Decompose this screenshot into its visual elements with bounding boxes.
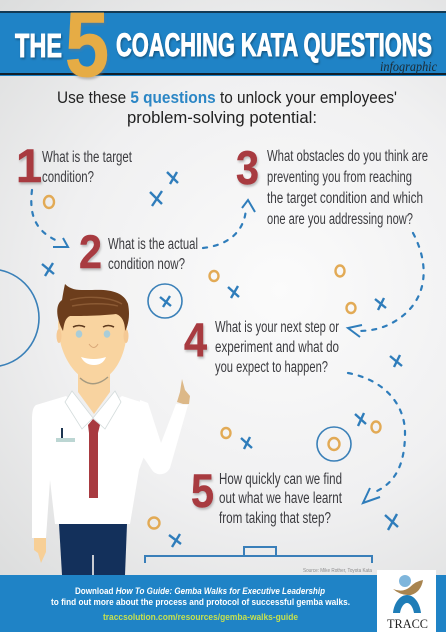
character <box>32 284 190 575</box>
head <box>58 308 127 380</box>
trousers <box>59 524 127 575</box>
subtitle: Use these 5 questions to unlock your employees' <box>57 88 397 107</box>
dashed arrow 3 to 4 <box>348 233 424 337</box>
subtitle <box>57 88 397 127</box>
infographic script label: infographic <box>380 60 438 75</box>
TRACC logo: TRACC <box>387 616 428 631</box>
question 5: from taking that step? <box>219 510 331 527</box>
question 4: experiment and what do <box>215 339 339 356</box>
question 5: 5 <box>191 464 214 517</box>
question 2: 2 <box>79 225 102 278</box>
question 3: 3 <box>236 141 259 194</box>
footer text <box>51 586 350 622</box>
question 2: What is the actual <box>108 236 198 253</box>
field line <box>145 547 372 563</box>
question 1: condition? <box>42 169 94 186</box>
question 2: condition now? <box>108 256 185 273</box>
question 1: What is the target <box>42 149 133 166</box>
pointing hand <box>177 379 190 404</box>
header banner <box>0 11 446 76</box>
dashed arrow 4 to 5 <box>348 373 405 503</box>
title: THE <box>15 27 62 64</box>
question 5: How quickly can we find <box>219 471 342 488</box>
chin <box>80 377 108 384</box>
target circles <box>148 284 351 461</box>
subtitle: problem-solving potential: <box>127 108 317 127</box>
footer bar <box>0 575 446 632</box>
x marks <box>42 172 402 547</box>
hair <box>57 284 129 331</box>
dashed arrow 1 to 2 <box>31 190 68 247</box>
footer text: Download How To Guide: Gemba Walks for Executive Leadership <box>75 586 325 596</box>
question 1: 1 <box>16 139 42 192</box>
dashed arrow 2 to 3 <box>203 200 255 248</box>
question 4: you expect to happen? <box>215 359 328 376</box>
eyes and brows <box>73 326 114 338</box>
source note: Source: Mike Rother, Toyota Kata <box>303 568 373 574</box>
question 3 <box>236 141 428 228</box>
nose <box>89 344 98 348</box>
tie <box>88 419 100 498</box>
neck <box>78 372 110 414</box>
question 5: out what we have learnt <box>219 490 343 507</box>
question 2 <box>79 225 198 278</box>
TRACC logo <box>377 570 436 632</box>
footer text: traccsolution.com/resources/gemba-walks-guide <box>103 612 298 622</box>
right arm <box>135 400 188 474</box>
question 1 <box>16 139 133 192</box>
pocket badge <box>56 428 75 442</box>
question 4 <box>184 313 339 376</box>
big circle left <box>0 269 39 367</box>
left hand <box>34 538 46 563</box>
collar <box>65 391 121 429</box>
question 4: 4 <box>184 313 207 366</box>
orange circles <box>44 196 380 528</box>
question 5 <box>191 464 343 527</box>
footer text: to find out more about the process and protocol of successful gemba walks. <box>51 597 350 607</box>
smile <box>81 357 106 365</box>
question 4: What is your next step or <box>215 319 339 336</box>
shirt <box>32 396 150 538</box>
